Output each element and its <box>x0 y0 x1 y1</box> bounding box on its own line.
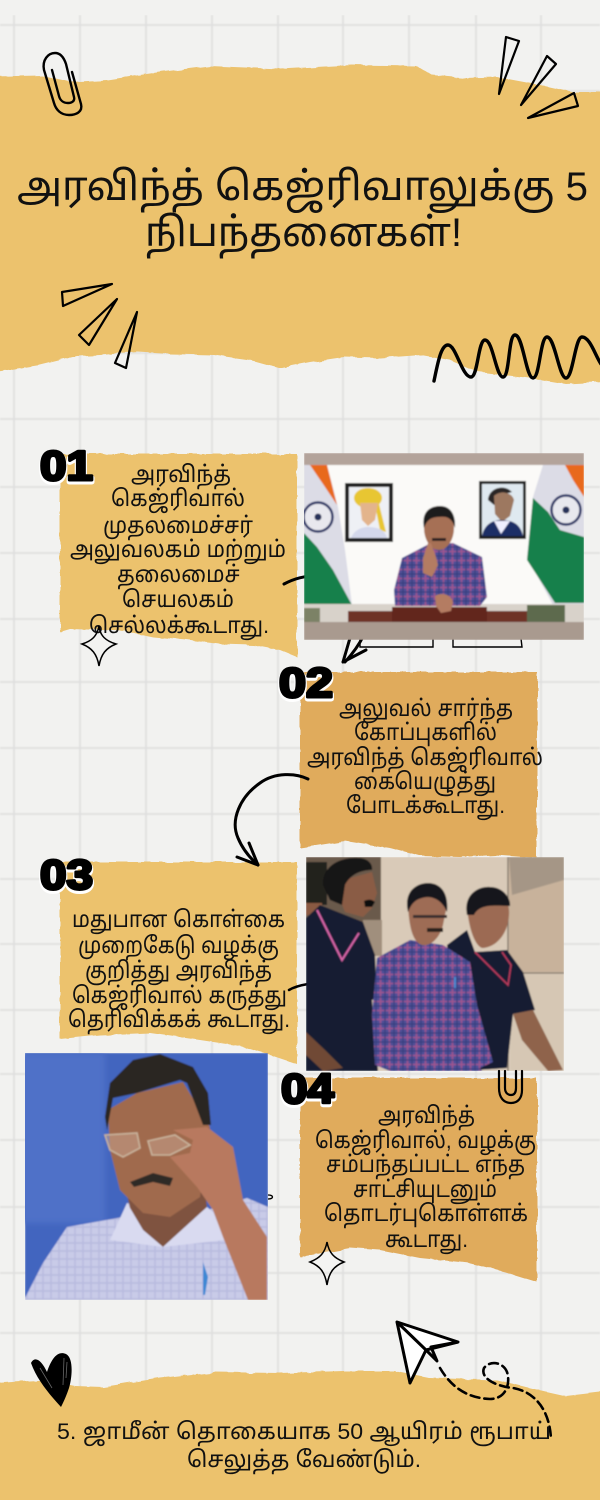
number 03: 03 <box>40 851 93 898</box>
hand <box>170 1127 267 1300</box>
text: condition 1: தலைமைச் <box>117 562 240 589</box>
guard left <box>306 905 378 1071</box>
centre man <box>372 940 493 1071</box>
icon: sparkle star 1 <box>82 626 116 666</box>
shirt <box>25 1198 268 1300</box>
table <box>304 604 584 622</box>
text: condition 1: செயலகம் <box>122 587 234 612</box>
text: condition 1: அலுவலகம் மற்றும் <box>70 537 286 564</box>
number 01: 01 <box>40 442 93 489</box>
text: condition 3: கெஜ்ரிவால் கருத்து <box>72 983 287 1011</box>
icon: heart <box>31 1353 72 1407</box>
text: condition 3: மதுபான கொள்கை <box>72 907 285 934</box>
text: condition 2: அரவிந்த் கெஜ்ரிவால் <box>307 745 543 773</box>
title <box>17 165 588 259</box>
text: condition 2: அலுவல் சார்ந்த <box>339 696 513 723</box>
text: condition 3: குறித்து அரவிந்த் <box>85 958 272 985</box>
glasses <box>105 1133 190 1157</box>
number 02: 02 <box>279 659 333 706</box>
text: condition 2: போடக்கூடாது. <box>346 793 505 820</box>
number 04: 04 <box>281 1065 335 1112</box>
panel: footer torn paper band <box>0 1371 600 1500</box>
text: condition 2 <box>307 696 543 820</box>
text: condition 5 <box>57 1419 551 1474</box>
text: condition 4: கெஜ்ரிவால், வழக்கு <box>315 1128 536 1156</box>
panel: condition 4 <box>300 1078 537 1282</box>
text: condition 4: சம்பந்தப்பட்ட எந்த <box>326 1152 525 1179</box>
face <box>108 1082 210 1217</box>
text: condition 1 <box>70 462 286 640</box>
icon: sparkle star 4 <box>310 1242 344 1285</box>
text: condition 4: அரவிந்த் <box>378 1103 475 1130</box>
stroke: connector behind photo 3 <box>289 984 308 990</box>
text: condition 4: சாட்சியுடனும் <box>353 1177 497 1204</box>
number 02: 02 <box>279 661 333 708</box>
panel: condition 3 <box>60 862 297 1064</box>
text: condition 1: செல்லக்கூடாது. <box>89 613 269 640</box>
text: condition 4: கூடாது. <box>385 1227 468 1254</box>
arrow: curve from condition 1 to 2 <box>284 576 522 662</box>
person behind <box>306 862 327 905</box>
collar <box>110 1203 225 1247</box>
text: condition 2: கையெழுத்து <box>354 769 496 796</box>
icon: zigzag scribble <box>434 335 600 381</box>
icon: paper plane <box>397 1322 458 1383</box>
text: condition 4 <box>315 1103 536 1254</box>
text: condition 3 <box>68 907 290 1034</box>
moustache <box>130 1173 173 1187</box>
man <box>394 543 487 606</box>
text: condition 1: அரவிந்த் <box>131 462 231 489</box>
neck <box>127 1190 207 1247</box>
panel: condition 2 <box>300 672 543 858</box>
text: condition 2: கோப்புகளில் <box>354 720 497 747</box>
photo: Kejriwal at desk <box>304 453 584 640</box>
text: condition 4: தொடர்புகொள்ளக் <box>324 1201 528 1228</box>
title: நிபந்தனைகள்! <box>145 211 462 259</box>
icon: paperclip top <box>44 53 81 115</box>
flag right <box>527 465 584 605</box>
text: condition 5: 5. ஜாமீன் தொகையாக 50 ஆயிரம் ரூபாய் <box>57 1419 551 1447</box>
arrow: curve from condition 2 to 3 <box>235 775 308 865</box>
text: condition 3: முறைகேடு வழக்கு <box>78 933 279 960</box>
guard right <box>447 930 535 1071</box>
number 03: 03 <box>40 853 93 900</box>
text: condition 3: தெரிவிக்கக் கூடாது. <box>68 1007 290 1034</box>
arrow: dashed flight path <box>440 1363 551 1440</box>
icon: spikes lower left <box>62 284 137 368</box>
text: condition 1: கெஜ்ரிவால் <box>111 486 245 514</box>
panel: header torn paper band <box>0 65 600 384</box>
title: அரவிந்த் கெஜ்ரிவாலுக்கு 5 <box>17 165 588 214</box>
flag left <box>304 465 352 605</box>
portrait right <box>479 481 526 539</box>
number 04: 04 <box>281 1067 335 1114</box>
panel: condition 1 <box>60 454 297 657</box>
text: condition 5: செலுத்த வேண்டும். <box>187 1447 421 1474</box>
stroke: small arc beside photo <box>268 1195 272 1199</box>
text: condition 1: முதலமைச்சர் <box>103 513 254 540</box>
photo: Kejriwal adjusting glasses <box>15 1053 268 1300</box>
icon: paperclip lower <box>499 1071 522 1103</box>
hair <box>105 1054 211 1130</box>
icon: spikes top right <box>499 37 578 118</box>
portrait left <box>345 483 393 542</box>
number 01: 01 <box>40 444 93 491</box>
photo: Kejriwal walking with guards <box>306 857 564 1071</box>
pen <box>203 1262 208 1295</box>
